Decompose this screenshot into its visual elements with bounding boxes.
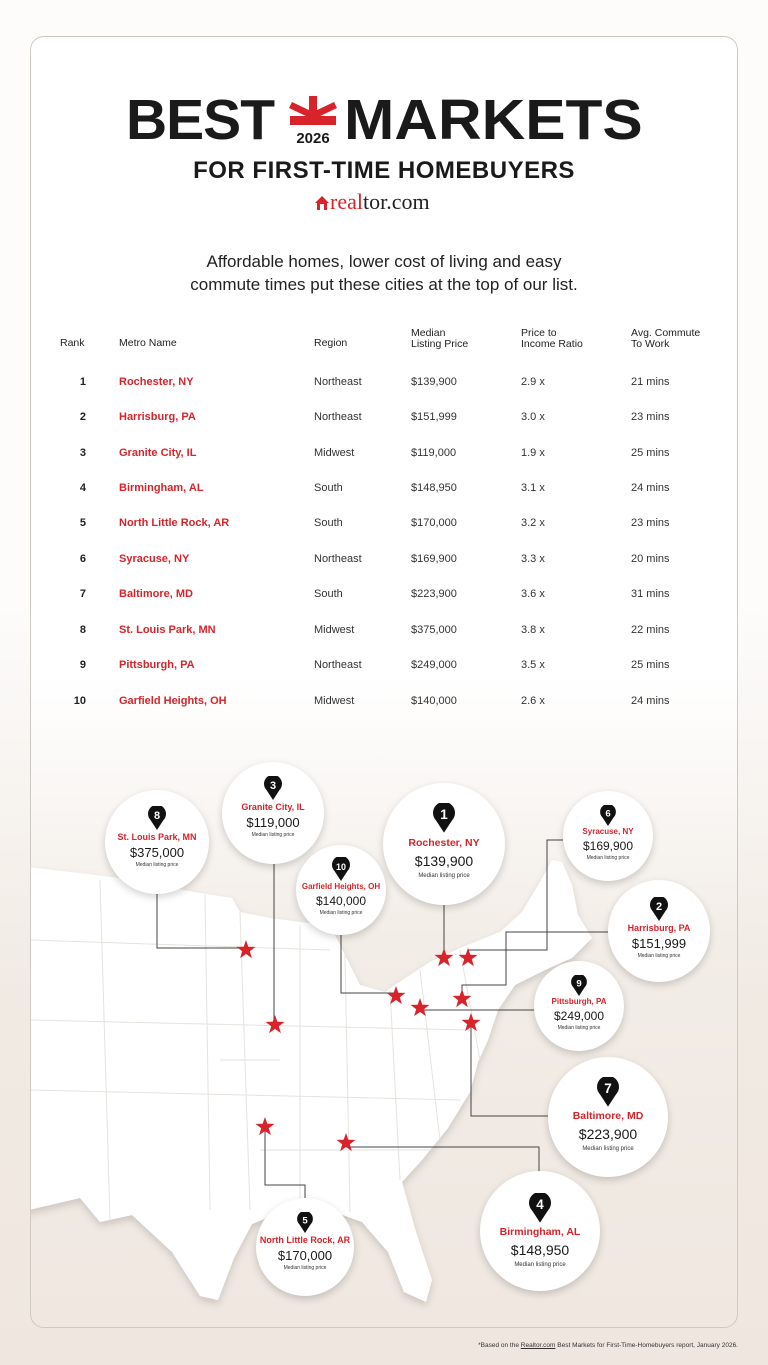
- icon: 2026 logo: 2026: [296, 130, 330, 147]
- table: Northeast: [314, 553, 362, 565]
- bubble 9: Pittsburgh: [534, 961, 624, 1051]
- bubble 7: Baltimore: Baltimore, MD: [573, 1110, 643, 1122]
- tagline: commute times put these cities at the top of our list.: [190, 275, 578, 294]
- table: $249,000: [411, 659, 457, 671]
- table: 24 mins: [631, 695, 670, 707]
- bubble 7: Baltimore: 7: [604, 1081, 612, 1096]
- table: Midwest: [314, 447, 354, 459]
- table: 4: [80, 482, 86, 494]
- bubble 8: St. Louis Park: St. Louis Park, MN: [117, 832, 196, 842]
- bubble 5: North Little Rock: $170,000: [278, 1248, 332, 1263]
- bubble 10: Garfield Heights: [296, 845, 386, 935]
- bubble 6: Syracuse: $169,900: [583, 839, 633, 853]
- table: 2.6 x: [521, 695, 545, 707]
- table: 10: [74, 695, 86, 707]
- table: 31 mins: [631, 588, 670, 600]
- bubble 8: St. Louis Park: 8: [154, 810, 160, 822]
- bubble 1: Rochester: $139,900: [415, 853, 473, 869]
- bubble 1: Rochester: Rochester, NY: [408, 837, 480, 849]
- table: South: [314, 482, 343, 494]
- table header: Price to: [521, 327, 557, 339]
- table: St. Louis Park, MN: [119, 624, 216, 636]
- table header: Avg. Commute: [631, 327, 700, 339]
- table header: To Work: [631, 338, 669, 350]
- table: Baltimore, MD: [119, 588, 193, 600]
- title word BEST: BEST: [126, 88, 274, 152]
- table: $148,950: [411, 482, 457, 494]
- table: 21 mins: [631, 376, 670, 388]
- table: $170,000: [411, 517, 457, 529]
- table: 22 mins: [631, 624, 670, 636]
- bubble 8: St. Louis Park: $375,000: [130, 845, 184, 860]
- table: 3.3 x: [521, 553, 545, 565]
- bubble 4: Birmingham: [480, 1171, 600, 1291]
- bubble 2: Harrisburg: Median listing price: [638, 953, 680, 959]
- table: Syracuse, NY: [119, 553, 189, 565]
- subtitle: FOR FIRST-TIME HOMEBUYERS: [193, 157, 575, 184]
- bubble 3: Granite City: $119,000: [246, 815, 300, 830]
- table header: Median: [411, 327, 445, 339]
- bubble 7: Baltimore: [548, 1057, 668, 1177]
- bubble 10: Garfield Heights: 10: [336, 862, 346, 872]
- table header: [60, 327, 700, 350]
- table: Pittsburgh, PA: [119, 659, 195, 671]
- bubble 2: Harrisburg: [608, 880, 710, 982]
- table: 3.6 x: [521, 588, 545, 600]
- bubble 8: St. Louis Park: [105, 790, 209, 894]
- table: 23 mins: [631, 411, 670, 423]
- table header: Income Ratio: [521, 338, 583, 350]
- table: North Little Rock, AR: [119, 517, 229, 529]
- table: 24 mins: [631, 482, 670, 494]
- table: $140,000: [411, 695, 457, 707]
- table: 2.9 x: [521, 376, 545, 388]
- bubble 5: North Little Rock: North Little Rock, AR: [260, 1235, 350, 1245]
- table: $139,900: [411, 376, 457, 388]
- table: 1: [80, 376, 86, 388]
- bubble 1: Rochester: [383, 783, 505, 905]
- bubble 3: Granite City: Granite City, IL: [241, 802, 305, 812]
- bubble 4: Birmingham: Birmingham, AL: [500, 1226, 580, 1238]
- table: Midwest: [314, 695, 354, 707]
- table: 3.0 x: [521, 411, 545, 423]
- table: Granite City, IL: [119, 447, 196, 459]
- table: 3.1 x: [521, 482, 545, 494]
- table: $119,000: [411, 447, 456, 459]
- bubble 5: North Little Rock: [256, 1198, 354, 1296]
- table: [60, 327, 700, 707]
- table: 1.9 x: [521, 447, 545, 459]
- table: Birmingham, AL: [119, 482, 204, 494]
- bubble 4: Birmingham: 4: [536, 1197, 544, 1212]
- table: $169,900: [411, 553, 457, 565]
- table: 3: [80, 447, 86, 459]
- bubble 3: Granite City: [222, 762, 324, 864]
- table: 6: [80, 553, 86, 565]
- bubble 6: Syracuse: 6: [605, 808, 611, 819]
- tagline: [190, 252, 578, 294]
- bubble 2: Harrisburg: $151,999: [632, 936, 686, 951]
- bubble 2: Harrisburg: 2: [656, 901, 662, 913]
- table: $375,000: [411, 624, 457, 636]
- table header: Listing Price: [411, 338, 468, 350]
- table: Midwest: [314, 624, 354, 636]
- bubble 10: Garfield Heights: Garfield Heights, OH: [302, 882, 380, 891]
- table: 3.2 x: [521, 517, 545, 529]
- bubble 1: Rochester: Median listing price: [418, 873, 470, 879]
- leader lines: [157, 840, 608, 1198]
- table: 25 mins: [631, 659, 670, 671]
- table: Northeast: [314, 376, 362, 388]
- bubble 9: Pittsburgh: 9: [576, 978, 582, 989]
- table: 2: [80, 411, 86, 423]
- table: Garfield Heights, OH: [119, 695, 227, 707]
- table header: Region: [314, 337, 347, 349]
- table: South: [314, 588, 343, 600]
- table header: Rank: [60, 337, 85, 349]
- bubble 4: Birmingham: $148,950: [511, 1242, 569, 1258]
- footnote: *Based on the Realtor.com Best Markets for First-Time-Homebuyers report, January 2026.: [478, 1342, 738, 1349]
- table: Harrisburg, PA: [119, 411, 196, 423]
- table: South: [314, 517, 343, 529]
- table: Rochester, NY: [119, 376, 194, 388]
- table header: Metro Name: [119, 337, 177, 349]
- table: 3.8 x: [521, 624, 545, 636]
- table: 5: [80, 517, 86, 529]
- table: 7: [80, 588, 86, 600]
- bubble 7: Baltimore: $223,900: [579, 1126, 637, 1142]
- bubble 5: North Little Rock: Median listing price: [284, 1265, 326, 1271]
- table: 9: [80, 659, 86, 671]
- bubble 5: North Little Rock: 5: [302, 1215, 308, 1226]
- table: Northeast: [314, 659, 362, 671]
- table: 8: [80, 624, 86, 636]
- US map: [20, 860, 592, 1302]
- realtor.com logo: realtor.com: [330, 189, 430, 214]
- table: 23 mins: [631, 517, 670, 529]
- bubble 10: Garfield Heights: Median listing price: [320, 910, 362, 916]
- table: Northeast: [314, 411, 362, 423]
- table: 3.5 x: [521, 659, 545, 671]
- bubble 9: Pittsburgh: $249,000: [554, 1009, 604, 1023]
- table: 20 mins: [631, 553, 670, 565]
- title: [126, 88, 643, 152]
- bubble 4: Birmingham: Median listing price: [514, 1262, 566, 1268]
- bubble 6: Syracuse: Syracuse, NY: [582, 827, 634, 836]
- stars: [236, 940, 480, 1151]
- bubble 6: Syracuse: [563, 791, 653, 881]
- table: 25 mins: [631, 447, 670, 459]
- table: $151,999: [411, 411, 457, 423]
- bubble 9: Pittsburgh: Pittsburgh, PA: [552, 997, 606, 1006]
- bubble 3: Granite City: 3: [270, 780, 276, 792]
- bubble 9: Pittsburgh: Median listing price: [558, 1025, 600, 1031]
- bubble 2: Harrisburg: Harrisburg, PA: [628, 923, 690, 933]
- bubble 8: St. Louis Park: Median listing price: [136, 862, 178, 868]
- bubble 10: Garfield Heights: $140,000: [316, 894, 366, 908]
- tagline: Affordable homes, lower cost of living and easy: [206, 252, 562, 271]
- icon: 2026 logo: [289, 96, 337, 147]
- table: $223,900: [411, 588, 457, 600]
- bubble 6: Syracuse: Median listing price: [587, 855, 629, 861]
- title word MARKETS: MARKETS: [344, 88, 643, 152]
- bubble 1: Rochester: 1: [440, 807, 448, 822]
- map with stars and leader lines: [31, 840, 608, 1306]
- bubble 3: Granite City: Median listing price: [252, 832, 294, 838]
- bubble 7: Baltimore: Median listing price: [582, 1146, 634, 1152]
